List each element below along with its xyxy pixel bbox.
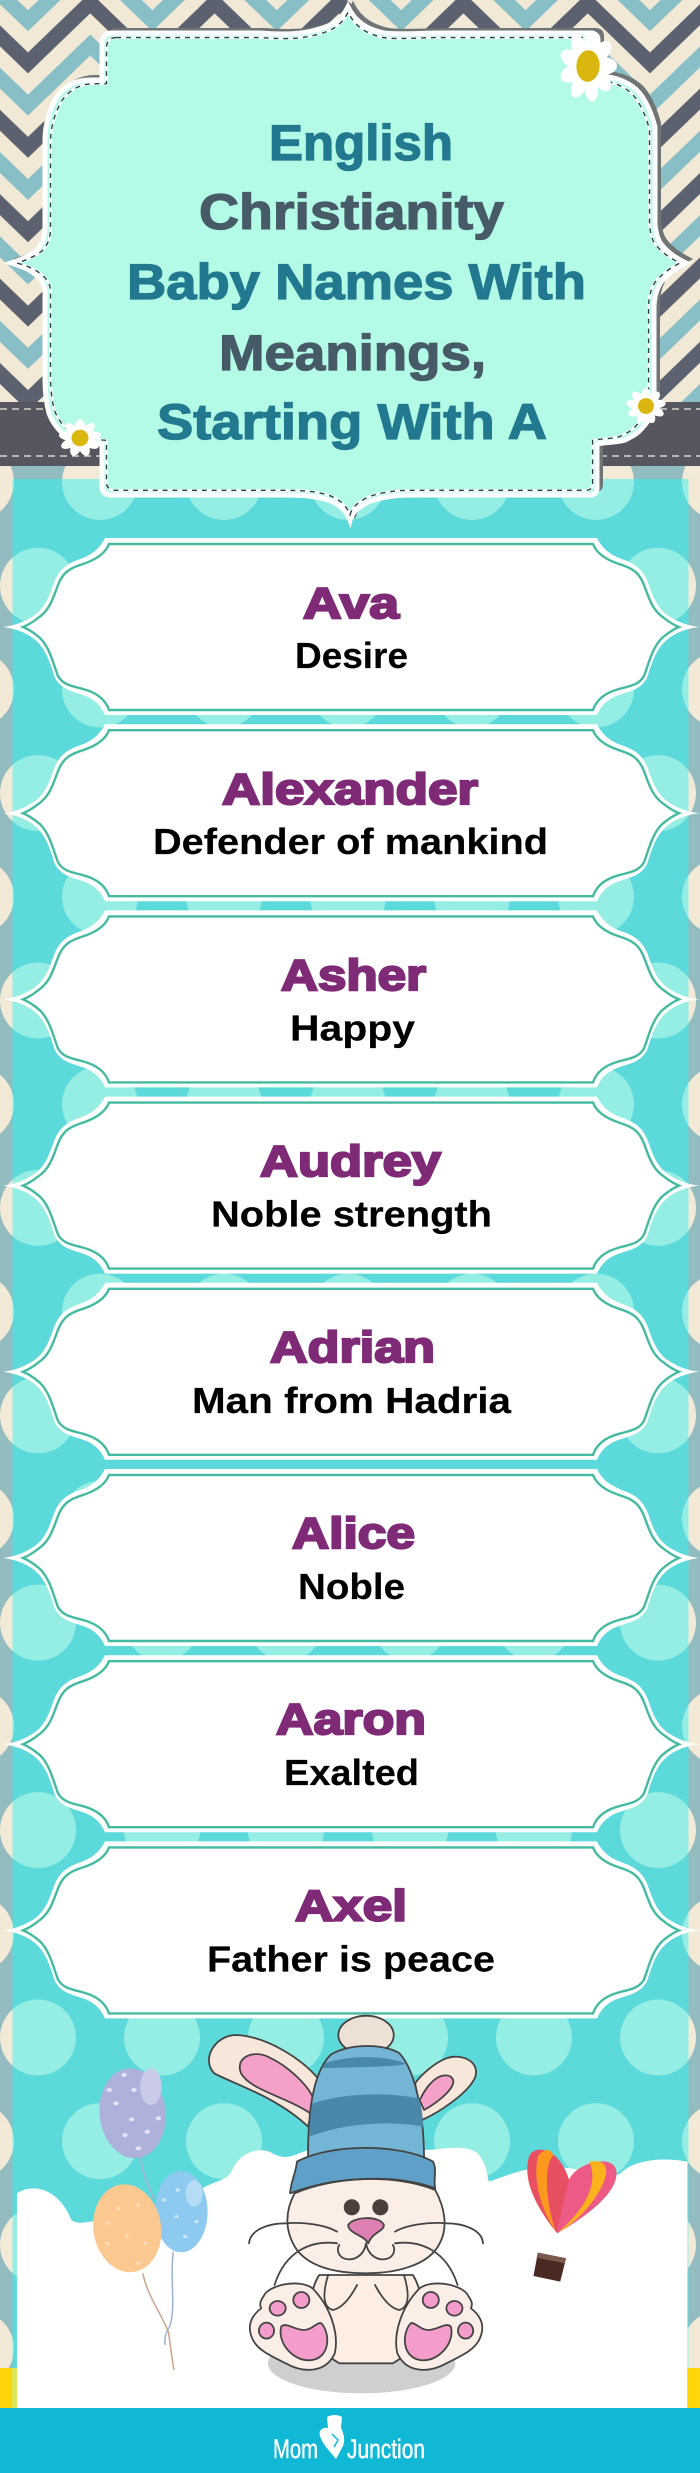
yellow corner accents — [0, 2368, 700, 2408]
logo: MomJunction — [273, 2415, 425, 2464]
icon: daisy top right — [554, 24, 622, 109]
card: Axel — [3, 1841, 699, 2018]
card: Aaron: Exalted — [284, 1752, 419, 1793]
balloons — [89, 2067, 208, 2370]
card: Aaron — [3, 1655, 699, 1832]
card: Audrey: Noble strength — [211, 1194, 492, 1235]
icon: daisy right — [625, 388, 667, 424]
card: Asher: Happy — [290, 1007, 415, 1048]
heart balloon — [527, 2150, 616, 2282]
card: Ava: Desire — [295, 635, 408, 676]
card: Adrian: Adrian — [270, 1323, 435, 1372]
card: Axel: Axel — [295, 1881, 407, 1930]
title text — [127, 115, 586, 450]
card: Alexander: Defender of mankind — [153, 821, 548, 862]
logo: MomJunction: Mom — [273, 2434, 318, 2464]
white cloud — [17, 2148, 687, 2408]
background: polka dot side strips — [0, 466, 700, 2408]
title text: Meanings, — [219, 325, 486, 381]
card: Audrey — [3, 1097, 699, 1274]
card: Adrian: Man from Hadria — [192, 1380, 512, 1421]
card: Audrey: Audrey — [260, 1137, 442, 1186]
title text: Starting With A — [157, 394, 547, 450]
card: Alice — [3, 1469, 699, 1646]
card: Alice: Noble — [298, 1566, 405, 1607]
icon: daisy left — [58, 419, 102, 457]
card: Alexander: Alexander — [222, 765, 478, 814]
logo: MomJunction: Junction — [347, 2434, 425, 2464]
background: teal polka dot field — [12, 479, 688, 2408]
card: Ava: Ava — [303, 579, 400, 628]
illustration: clouds, balloons, bunny — [17, 2016, 687, 2408]
card: Alexander — [3, 724, 699, 901]
card: Axel: Father is peace — [207, 1938, 495, 1979]
card: Aaron: Aaron — [276, 1695, 426, 1744]
card: Asher: Asher — [281, 951, 426, 1000]
card: Ava — [3, 538, 699, 715]
background: chevron header pattern — [0, 0, 700, 402]
bunny — [209, 2016, 483, 2393]
background: dark stitched band — [0, 402, 700, 466]
card: Asher — [3, 910, 699, 1087]
card: Adrian — [3, 1283, 699, 1460]
title text: English — [269, 115, 453, 171]
card: Alice: Alice — [292, 1509, 415, 1558]
footer bar — [0, 2408, 700, 2473]
title panel — [11, 3, 691, 520]
title text: Baby Names With — [127, 254, 586, 310]
title text: Christianity — [199, 184, 504, 240]
